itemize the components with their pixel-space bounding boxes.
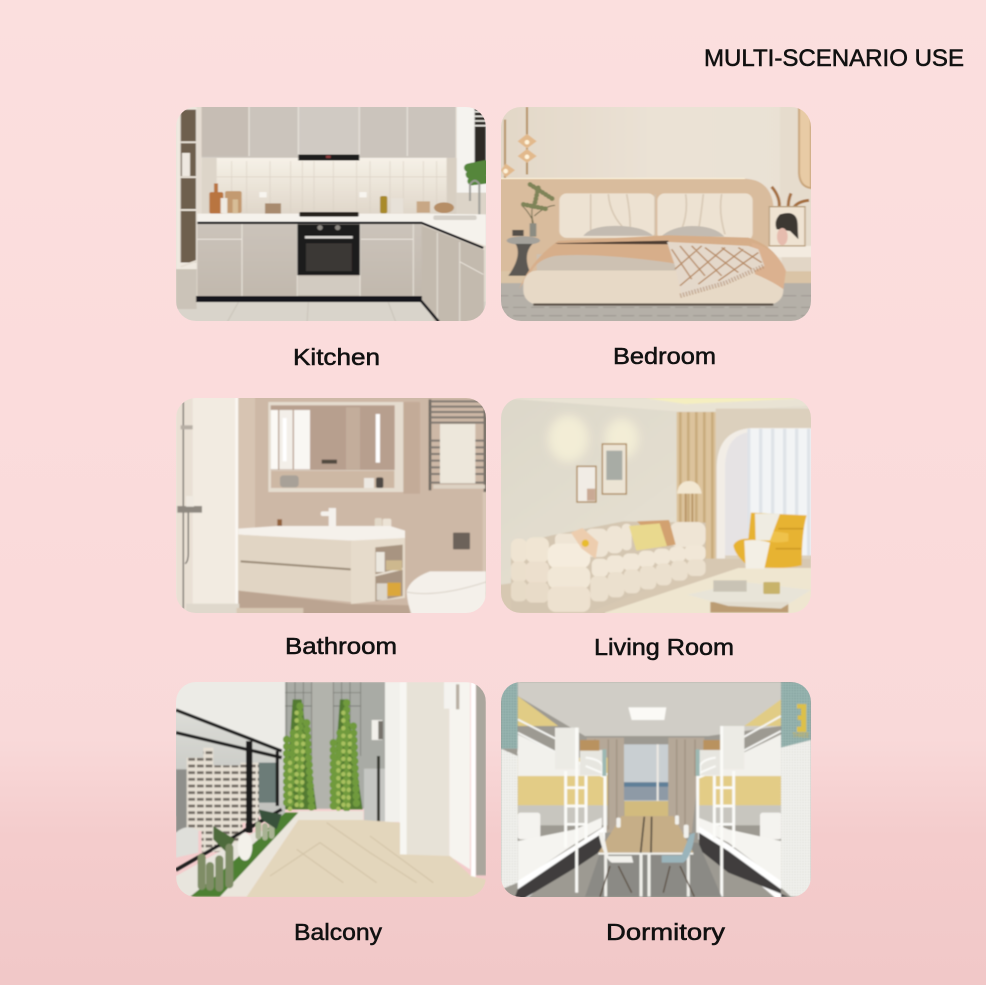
oven (297, 224, 360, 295)
wood headboard wall (495, 178, 774, 276)
kitchen wall and floor (170, 100, 495, 329)
glass coffee table (687, 580, 811, 613)
panel: bathroom label: Bathroom (285, 633, 397, 659)
succulents and rocks (202, 809, 282, 888)
duvet right flap (752, 243, 786, 289)
curtains (587, 738, 704, 833)
curtain (677, 412, 716, 559)
shower area (170, 392, 238, 622)
floor and rug (495, 271, 820, 330)
bathroom wall (170, 392, 495, 622)
sofa front tufts (590, 559, 706, 601)
white walls and pillar (385, 682, 486, 879)
panel: kitchen label: Kitchen (293, 344, 380, 370)
bed pillows and headboard cushions (559, 193, 753, 241)
left bunk beds (512, 719, 608, 906)
sky and balcony ceiling wall (170, 676, 285, 816)
wall lamp and bollard (364, 720, 388, 823)
corner cabinets (422, 225, 484, 329)
panel: balcony photo (176, 682, 486, 897)
window and plant (447, 100, 490, 218)
towel rail (430, 399, 485, 492)
backsplash tiles (202, 158, 447, 214)
tall shelf (176, 107, 197, 309)
woven throw blanket (667, 242, 764, 296)
range hood (298, 155, 359, 160)
floor (585, 843, 722, 897)
mattress and duvet (519, 235, 786, 289)
right bunk beds (696, 716, 788, 903)
framed art with dried stems (769, 187, 809, 246)
panel: living room photo (501, 398, 811, 613)
study table and chairs (598, 815, 695, 897)
framed wall art (577, 444, 626, 502)
toilet (407, 571, 486, 619)
base cabinets (197, 224, 422, 296)
floor and shadow (186, 591, 410, 622)
faucet and bottles (277, 508, 391, 533)
wall shelf (768, 246, 815, 271)
pendant lights (501, 107, 537, 189)
bedroom wall (495, 100, 820, 329)
sofa seat tufts (592, 545, 706, 577)
planter ledge (176, 811, 363, 897)
window (624, 744, 668, 816)
title: MULTI-SCENARIO USE (704, 45, 964, 72)
back stone wall (285, 682, 385, 809)
living room wall (495, 392, 820, 622)
side table and plant (507, 184, 555, 276)
bed shadow (533, 303, 773, 306)
countertop with hob (197, 212, 486, 248)
ceiling cove (501, 398, 811, 411)
panel: dormitory photo (501, 682, 811, 897)
panel: balcony label: Balcony (294, 919, 382, 945)
sofa cushions and flower pillow (571, 520, 676, 559)
railing (176, 710, 282, 870)
right wall with arch (716, 409, 816, 559)
yellow lounge chair (733, 513, 807, 569)
panel: kitchen photo (176, 107, 486, 321)
bed base (523, 270, 783, 304)
herringbone floor (247, 820, 486, 899)
ceiling and walls (495, 676, 820, 906)
vanity counter (238, 526, 405, 541)
floor lamp (677, 481, 702, 523)
left dotted wall panel (501, 682, 518, 889)
panel: bedroom photo (501, 107, 811, 321)
floor and rug (495, 559, 811, 622)
cabinet open shelf (271, 471, 394, 488)
climbing plants (285, 699, 363, 809)
right dotted wall panel (781, 682, 811, 897)
panel: dormitory label: Dormitory (606, 919, 725, 945)
counter items (209, 183, 454, 214)
room number sign (793, 704, 810, 739)
cream tufted sofa (511, 521, 706, 613)
panel: living room label: Living Room (594, 634, 734, 660)
toe kick (196, 296, 439, 322)
mirror cabinet (268, 402, 403, 492)
upper cabinets (202, 100, 456, 158)
flush plate (453, 533, 470, 549)
sofa arm tufts (511, 537, 590, 612)
ceiling light (628, 707, 666, 720)
panel: bathroom photo (176, 398, 486, 613)
city buildings (176, 748, 276, 858)
panel: bedroom label: Bedroom (613, 343, 716, 369)
vanity cabinet (238, 535, 405, 604)
sofa back tufts (555, 522, 706, 557)
